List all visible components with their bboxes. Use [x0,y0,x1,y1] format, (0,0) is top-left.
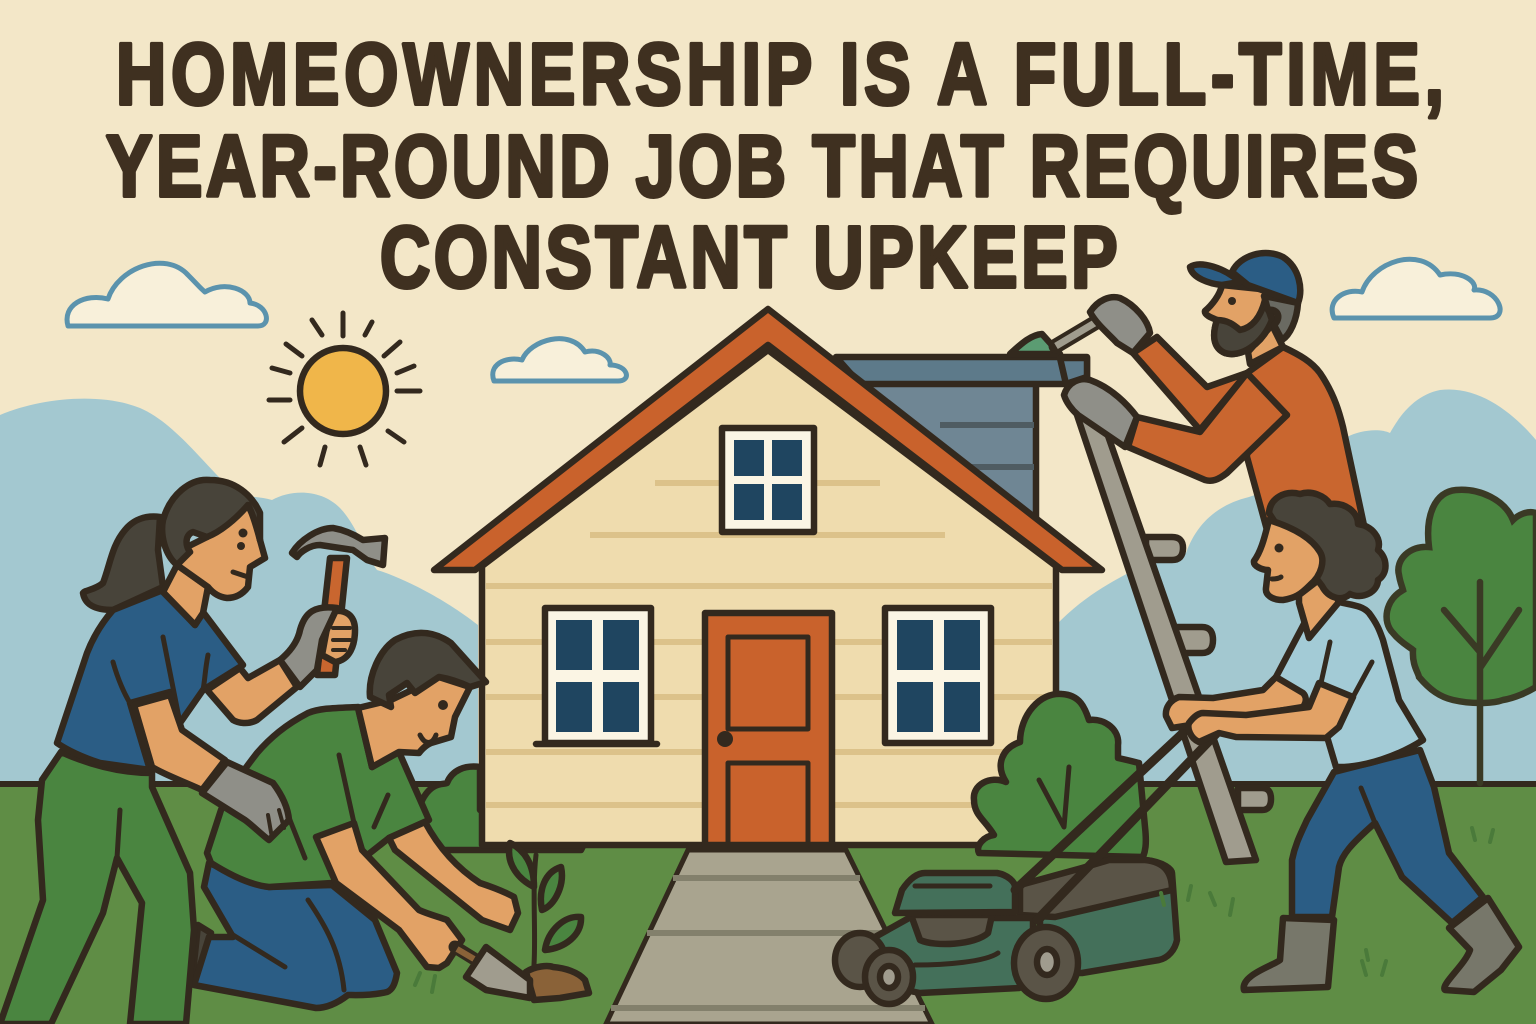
hair [370,633,486,707]
right window [885,608,991,743]
face [177,505,265,598]
left boot [1244,918,1334,990]
leaves in gutter [1010,334,1060,354]
near arm [1188,683,1353,742]
cloud: left [67,263,266,326]
gutter end [1060,358,1087,384]
shoe [192,925,211,983]
far arm [389,822,518,930]
house [434,309,1102,845]
lower glove [1064,379,1137,447]
head [1205,285,1272,354]
hand [322,611,355,662]
lawn mower [835,730,1217,1004]
handles [1015,730,1217,920]
neck [1299,575,1339,638]
person: man on ladder [1010,253,1365,530]
house wall [482,350,1056,845]
ladder [1072,400,1271,862]
walkway [606,850,932,1024]
shirt [57,590,243,770]
hair [162,480,260,565]
hood [895,873,1015,913]
title: YEAR-ROUND JOB THAT REQUIRES [106,118,1418,215]
cloud: right [1332,259,1500,318]
deck [875,918,1033,993]
person: woman with hammer [0,480,385,1024]
under hood [911,915,992,944]
person: woman with mower [1166,493,1519,992]
neck and face [358,677,470,767]
glove [280,607,337,687]
grass tufts [415,828,1493,992]
cap [1232,253,1300,303]
beard [1214,300,1272,354]
upper glove [1090,297,1150,353]
trousers [194,863,397,1008]
bag [1040,860,1177,973]
upper arm [1133,337,1247,430]
wheels [835,933,885,987]
siding [486,483,1052,805]
trousers [0,752,194,1024]
shirt [207,707,429,887]
trowel [1056,321,1098,346]
shirt [1276,602,1423,767]
trowel blade [466,947,530,998]
trousers [1292,750,1483,923]
ponytail [83,517,163,610]
title [106,26,1444,306]
far arm [1166,677,1306,728]
face [1254,520,1322,600]
lower glove [202,762,289,840]
side siding [840,378,1036,520]
hammer [292,528,385,675]
neck [1248,325,1283,364]
stem [534,855,536,965]
forearm [207,660,297,723]
right boot [1444,898,1519,992]
shrub behind gardener [420,767,585,850]
ground [0,785,1536,1024]
gutter [836,357,1087,384]
leaves [509,843,581,950]
title: CONSTANT UPKEEP [380,209,1118,306]
lower arm [1128,373,1287,481]
bush right of door [974,694,1146,857]
near arm [316,823,462,968]
title: HOMEOWNERSHIP IS A FULL-TIME, [116,26,1444,123]
curly hair [1269,493,1386,598]
neck [163,565,208,625]
left window [536,608,657,744]
icon: sun [269,313,420,465]
person: kneeling gardener [192,633,518,1008]
background hills [0,389,1536,785]
cloud: middle [493,339,626,381]
sapling and trowel [455,843,589,1000]
door [705,613,832,845]
tree [1387,490,1536,783]
soil [526,966,589,1000]
lower arm [134,695,225,790]
attic window [722,428,814,532]
hair and ear [1264,296,1298,340]
torso [1247,347,1365,530]
trowel handle [455,947,476,960]
roof [434,309,1102,570]
